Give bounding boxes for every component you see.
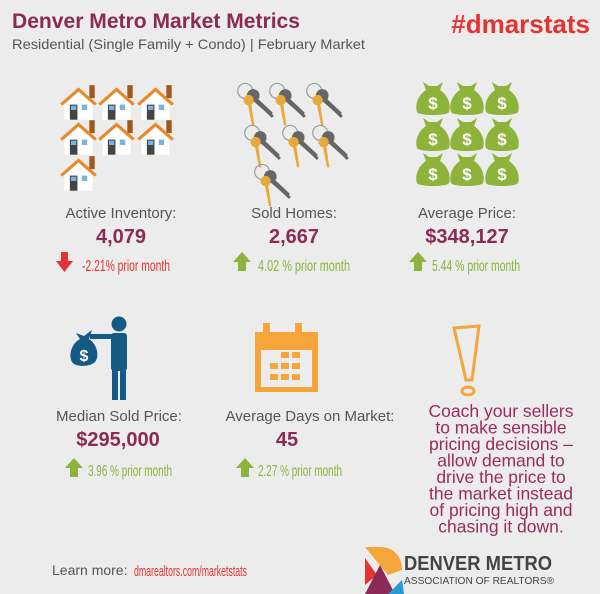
footer: learn more: Learn more: [52, 562, 127, 578]
hashtag: #dmarstats [451, 9, 590, 39]
stat: average days on market: 45 [276, 429, 298, 451]
title: Denver Metro Market Metrics [12, 10, 300, 33]
stat: median sold price: Median Sold Price: [56, 408, 182, 425]
subtitle: Residential (Single Family + Condo) | February Market [12, 36, 365, 52]
logo: ASSOCIATION OF REALTORS® [404, 575, 554, 587]
footer: learn more [52, 562, 247, 580]
logo [365, 547, 554, 594]
stat: sold homes: Sold Homes: [251, 205, 337, 222]
callout: advice text [429, 401, 574, 536]
stat: average price: $348,127 [425, 226, 509, 248]
stat: active inventory: Active Inventory: [66, 205, 176, 222]
stat: active inventory: 4,079 [96, 226, 146, 248]
icon: calendar [255, 323, 318, 392]
logo: DENVER METRO [404, 553, 552, 575]
stat: active inventory: -2.21% prior month [82, 258, 170, 275]
stat: sold homes: 2,667 [269, 226, 319, 248]
stat: average price: Average Price: [418, 205, 516, 222]
icon: man with money bag: $ [80, 348, 89, 365]
callout: advice text: Coach your sellers [429, 401, 574, 421]
callout: advice text: chasing it down. [438, 516, 564, 536]
icon: money bags [416, 82, 519, 186]
callout: advice text: the market instead [429, 484, 573, 504]
callout: advice text: drive the price to [436, 467, 566, 487]
footer: learn more: dmarealtors.com/marketstats [134, 563, 247, 580]
icon: keys [238, 83, 349, 206]
stat: average days on market: Average Days on Market: [226, 408, 394, 425]
stat: active inventory [56, 205, 176, 275]
stat: median sold price: $295,000 [76, 429, 160, 451]
callout: advice text: of pricing high and [429, 500, 573, 520]
stat: average days on market [226, 408, 394, 480]
stat: sold homes [233, 205, 350, 275]
stat: median sold price: 3.96 % prior month [88, 463, 172, 480]
icon: man with money bag [70, 316, 127, 400]
callout: advice text: allow demand to [437, 450, 565, 470]
stat: average price: 5.44 % prior month [432, 258, 520, 275]
icon: exclamation [454, 326, 479, 395]
stat: median sold price [56, 408, 182, 480]
stat: average days on market: 2.27 % prior month [258, 463, 342, 480]
stat: average price [409, 205, 520, 275]
callout: advice text: pricing decisions – [429, 434, 573, 454]
icon: houses [60, 85, 174, 191]
callout: advice text: to make sensible [435, 418, 567, 438]
stat: sold homes: 4.02 % prior month [258, 258, 350, 275]
